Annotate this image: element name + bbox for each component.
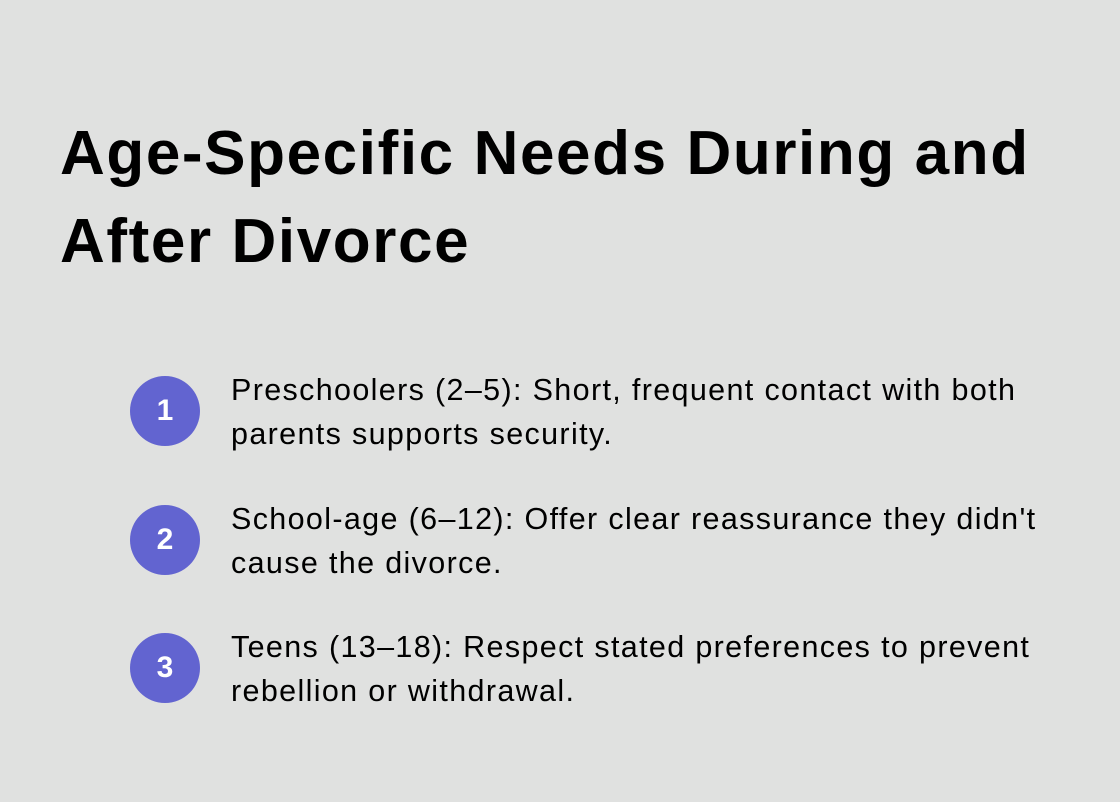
text 1: Preschoolers (2–5): Short, frequent contact with both <box>231 373 1016 407</box>
number badge 1 <box>130 376 200 446</box>
text 1: parents supports security. <box>231 417 613 451</box>
number badge 3: 3 <box>157 651 173 684</box>
item 2 <box>130 502 1036 580</box>
text 2: cause the divorce. <box>231 546 503 580</box>
item 1 <box>130 373 1016 451</box>
text 3: Teens (13–18): Respect stated preferences to prevent <box>231 630 1030 664</box>
number badge 2 <box>130 505 200 575</box>
text 2: School-age (6–12): Offer clear reassurance they didn't <box>231 502 1036 536</box>
title <box>60 119 1030 276</box>
title: Age-Specific Needs During and <box>60 119 1030 188</box>
item 3 <box>130 630 1030 708</box>
text 2 <box>231 502 1036 580</box>
number badge 1: 1 <box>157 394 173 427</box>
number badge 3 <box>130 633 200 703</box>
text 1 <box>231 373 1016 451</box>
title: After Divorce <box>60 207 470 276</box>
text 3: rebellion or withdrawal. <box>231 674 575 708</box>
text 3 <box>231 630 1030 708</box>
number badge 2: 2 <box>157 523 173 556</box>
